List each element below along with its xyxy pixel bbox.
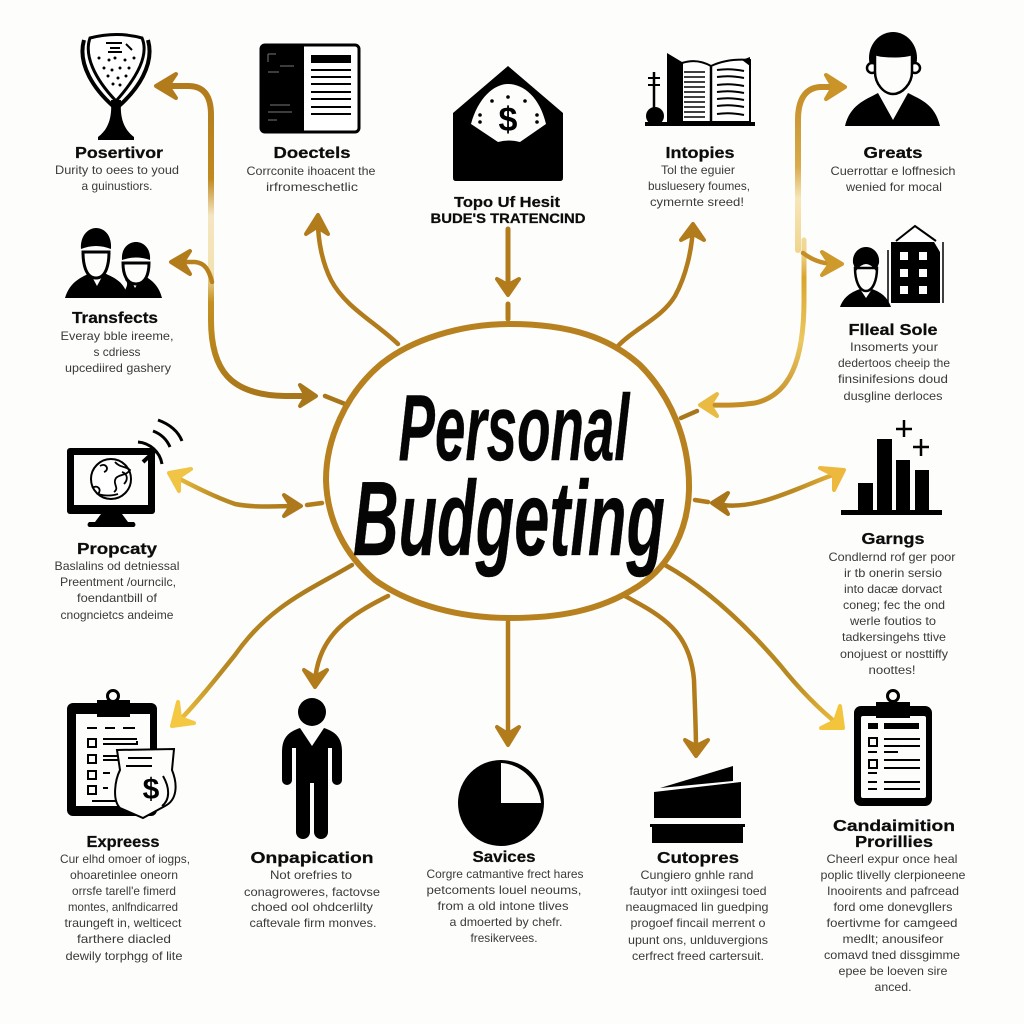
text block: dedertoos cheeip the [838,356,950,370]
text block: upcediired gashery [65,361,171,375]
arrow: hub to Candaimition Prorillies [665,565,843,728]
text block: Insomerts your [850,340,938,354]
text block: werle foutios to [849,614,936,628]
text block [828,550,956,677]
text block: ohoaretinlee oneorn [70,868,178,882]
heading: Candaimition [833,818,955,835]
panel: Doectels [246,44,376,194]
heading: Posertivor [75,145,163,162]
text block: noottes! [868,663,916,677]
text block: busluesery foumes, [648,179,750,193]
text block [626,868,768,963]
text block [426,867,584,945]
arrow: left trunk to Posertivor and hub [156,74,345,406]
text block: caftevale firm monves. [250,916,376,930]
text block: into dacæ dorvact [844,582,943,596]
text block: Corrconite ihoacent the [246,164,376,178]
arrow: hub to Propcaty [169,469,322,516]
text block: a dmoerted by chefr. [450,915,562,929]
heading: Prorillies [855,834,933,851]
title: Personal [398,375,631,480]
text block: tadkersingehs ttive [842,630,946,644]
icon: envelope with money [453,66,563,181]
text block: Condlernd rof ger poor [828,550,956,564]
text block: petcoments louel neoums, [426,883,582,897]
arrow: hub to Intopies [618,224,704,346]
panel: Posertivor [55,34,179,193]
text block: irfromeschetlic [266,180,358,194]
heading: Greats [864,145,922,162]
heading: Cutopres [657,850,739,867]
text block: Inooirents and pafrcead [827,884,959,898]
panel: Intopies [645,53,755,209]
arrow: hub to Expreess [172,565,352,726]
text block: farthere diacled [77,932,171,946]
arrow: hub to Cutopres [625,596,708,756]
text block [54,559,180,622]
text block [838,340,950,403]
heading: Propcaty [77,541,157,558]
text block: progoef fincail merrent o [630,916,766,930]
icon: open book [645,53,755,126]
arrow: right trunk to Greats, Filial Sole and hub [681,75,845,418]
text block: from a old intone tlives [438,899,568,913]
text block: Cheerl expur once heal [826,852,958,866]
text block: fautyor intt oxiingesi toed [630,884,766,898]
central hub ring [326,324,689,618]
heading: Intopies [666,145,734,162]
text block: poplic tlivelly clerpioneene [820,868,966,882]
text block: epee be loeven sire [838,964,948,978]
text block: a guinustiors. [82,179,152,193]
heading [833,818,955,851]
icon: person in suit [282,698,342,839]
arrow: hub to Onpapication [304,596,388,687]
text block [820,852,966,994]
text block: orrsfe tarell'e fimerd [72,884,176,898]
icon: clipboard with money shield [67,690,176,818]
heading: Transfects [72,310,158,327]
text block: Durity to oees to youd [55,163,179,177]
text block: Cuerrottar e loffnesich [830,164,956,178]
text block [648,163,750,209]
text block: Everay bble ireeme, [60,329,174,343]
heading: Onpapication [250,850,374,867]
heading [430,194,586,226]
panel: Topo Uf Hesit [430,66,586,226]
text block: Tol the eguier [661,163,735,177]
text block [60,329,174,375]
text block: foertivme for camgeed [826,916,958,930]
text block [830,164,956,194]
icon: person [845,32,940,126]
text block: comavd tned dissgimme [824,948,960,962]
text block: cerfrect freed cartersuit. [632,949,764,963]
heading: Savices [472,849,536,866]
text block: conagroweres, factovse [244,885,380,899]
text block: Not orefries to [270,868,352,882]
arrow: hub to Garngs [695,468,844,514]
text block: neaugmaced lin guedping [626,900,768,914]
text block: dewily torphgg of lite [66,949,183,963]
text block: cnogncietcs andeime [60,608,174,622]
text block [60,852,190,963]
text block: Corgre catmantive frect hares [426,867,584,881]
text block: upunt ons, unlduvergions [628,933,768,947]
arrow: hub to Doectels [306,215,398,344]
icon: trophy glass [82,34,150,140]
icon: person and building [840,226,943,307]
arrow: hub to Savices [497,622,519,745]
panel: Transfects [60,228,174,375]
title [353,375,665,578]
panel: Expreess [60,690,190,963]
title: Budgeting [353,460,665,578]
panel: Garngs [828,420,956,677]
panel: Greats [830,32,956,194]
arrow: branch to Transfects [171,251,212,282]
panel: Propcaty [54,420,182,622]
text block: fresikervees. [470,931,538,945]
icon: checklist clipboard [854,690,932,806]
text block: onojuest or nosttiffy [840,647,948,661]
text block: anced. [874,980,912,994]
connector arrows [156,74,845,756]
text block: medlt; anousifeor [842,932,944,946]
text block [244,868,380,930]
text block: montes, anlfndicarred [68,900,178,914]
text block: ir tb onerin sersio [844,566,942,580]
heading: Topo Uf Hesit [454,194,560,211]
icon: clipboard with money shield: $ [143,773,160,806]
text block [246,164,376,194]
text block: choed ool ohdcerlilty [251,900,373,914]
icon: two people [65,228,162,298]
text block: Cungiero gnhle rand [640,868,754,882]
panel: Cutopres [626,766,768,963]
heading: Garngs [862,531,924,548]
text block: ford ome donevgllers [834,900,952,914]
text block: dusgline derloces [844,389,942,403]
icon: pie chart [458,760,544,846]
text block [55,163,179,193]
panel: Candaimition Prorillies [820,690,966,994]
heading: Flleal Sole [848,322,938,339]
text block: wenied for mocal [845,180,942,194]
heading: Doectels [274,145,350,162]
icon: document [260,44,359,133]
text block: foendantbill of [77,591,158,605]
text block: Preentment /ourncilc, [60,575,176,589]
text block: s cdriess [94,345,140,359]
text block: Baslalins od detniessal [54,559,180,573]
icon: monitor with globe and signal [67,420,182,527]
icon: stacked cards [650,766,745,843]
arrow: top centre into hub [497,229,519,319]
text block: cymernte sreed! [650,195,744,209]
text block: coneg; fec the ond [843,598,945,612]
heading: BUDE'S TRATENCIND [430,211,586,226]
text block: finsinifesions doud [838,372,948,386]
icon: envelope with money: $ [499,101,518,139]
text block: traungeft in, welticect [64,916,182,930]
heading: Expreess [86,834,160,851]
panel: Savices [426,760,584,945]
text block: Cur elhd omoer of iogps, [60,852,190,866]
icon: bar chart with plus signs [841,420,942,515]
panel: Onpapication [244,698,380,930]
panel: Flleal Sole [838,226,950,403]
